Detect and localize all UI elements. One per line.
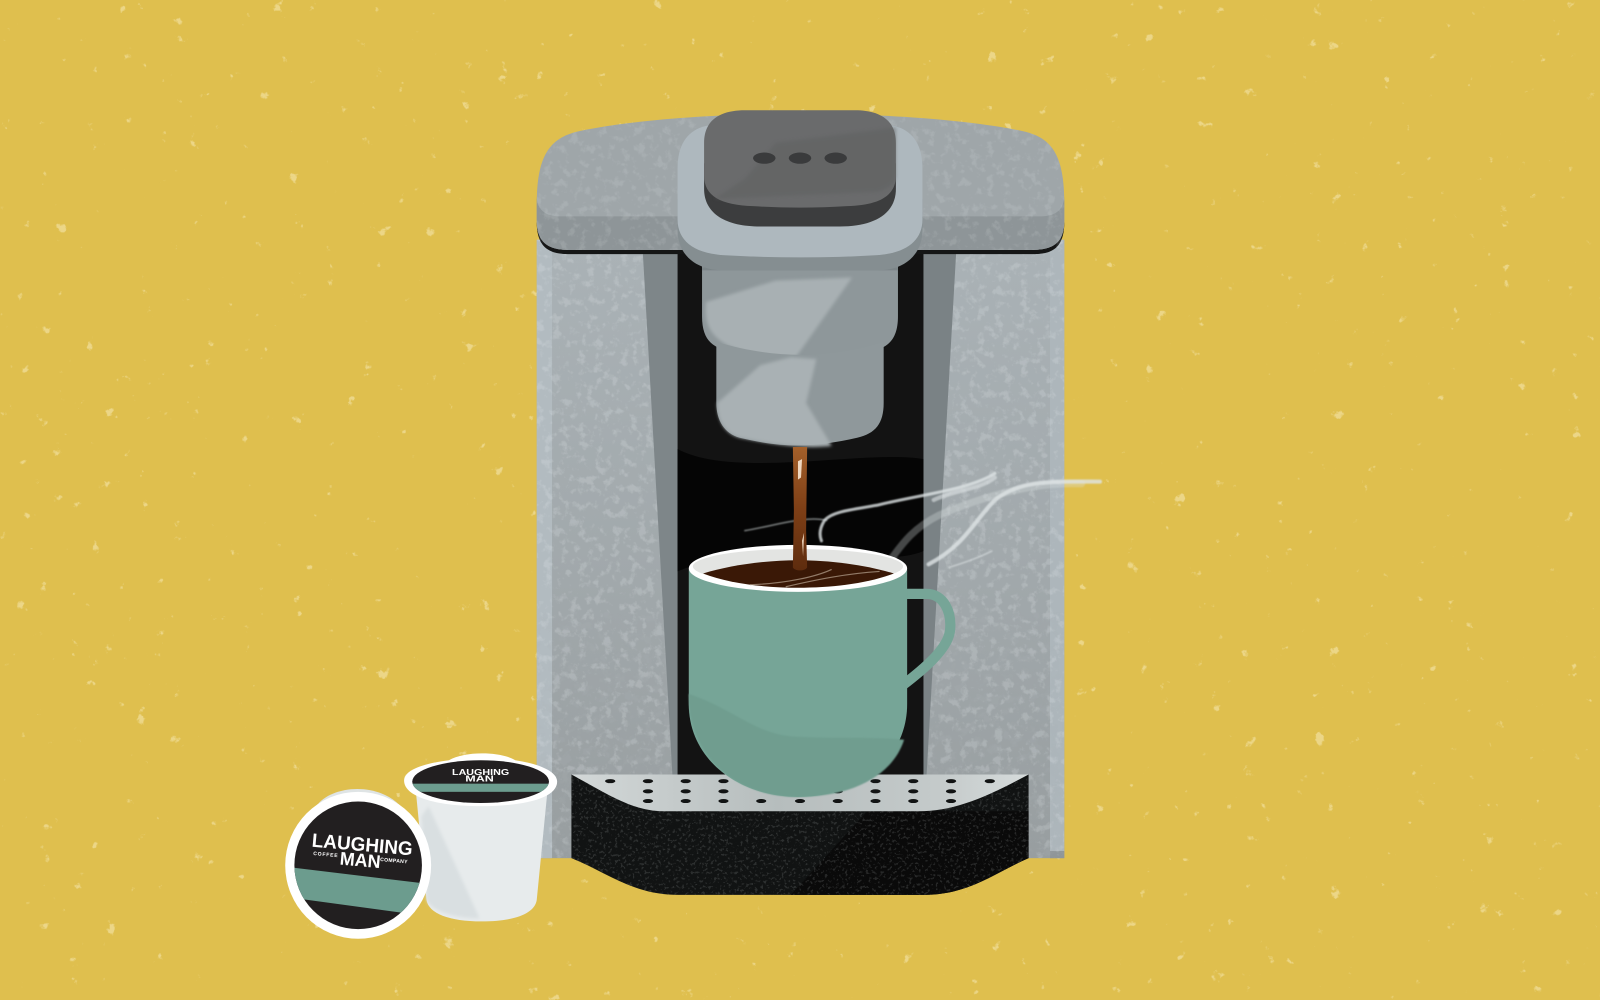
grate holes: [605, 779, 995, 803]
lower brew neck: [716, 342, 884, 447]
pod lid text: laughing: LAUGHING: [452, 767, 510, 777]
steam: [745, 473, 1100, 567]
pod lid text: man: MAN: [465, 775, 494, 784]
coffee surface: [703, 560, 894, 588]
coffee stream: [793, 447, 807, 570]
mug rim: [689, 545, 907, 592]
top head of machine: [537, 107, 1064, 254]
coffee machine: [537, 107, 1100, 895]
lying coffee pod: [285, 789, 431, 939]
drip tray grate: [571, 774, 1029, 811]
pod lid text: laughing: LAUGHING: [311, 830, 414, 860]
machine body: [537, 240, 1064, 858]
pod lid text: man: MAN: [339, 848, 381, 872]
pod lid band: [294, 868, 420, 912]
pod cup body: [415, 786, 548, 921]
pod rim: [285, 792, 431, 939]
mug handle: [898, 594, 950, 686]
pod cup behind lid: [316, 789, 408, 847]
coffee mug: [689, 545, 950, 797]
pod rim: [404, 753, 557, 806]
control button: [704, 110, 896, 227]
mug body: [689, 569, 907, 797]
dark opening: [678, 245, 923, 781]
pod lid text: coffee: COFFEE: [313, 851, 338, 859]
collar around control panel: [678, 124, 922, 270]
pod lid text: company: COMPANY: [380, 857, 408, 865]
body inner wedges: [643, 253, 956, 776]
upper brew neck: [702, 255, 898, 357]
standing coffee pod: [404, 753, 557, 921]
button dots: [753, 153, 847, 164]
pod lid: [294, 802, 422, 929]
pod lid: [412, 760, 549, 803]
pod lid band: [412, 784, 549, 792]
drip tray base: [571, 774, 1029, 895]
